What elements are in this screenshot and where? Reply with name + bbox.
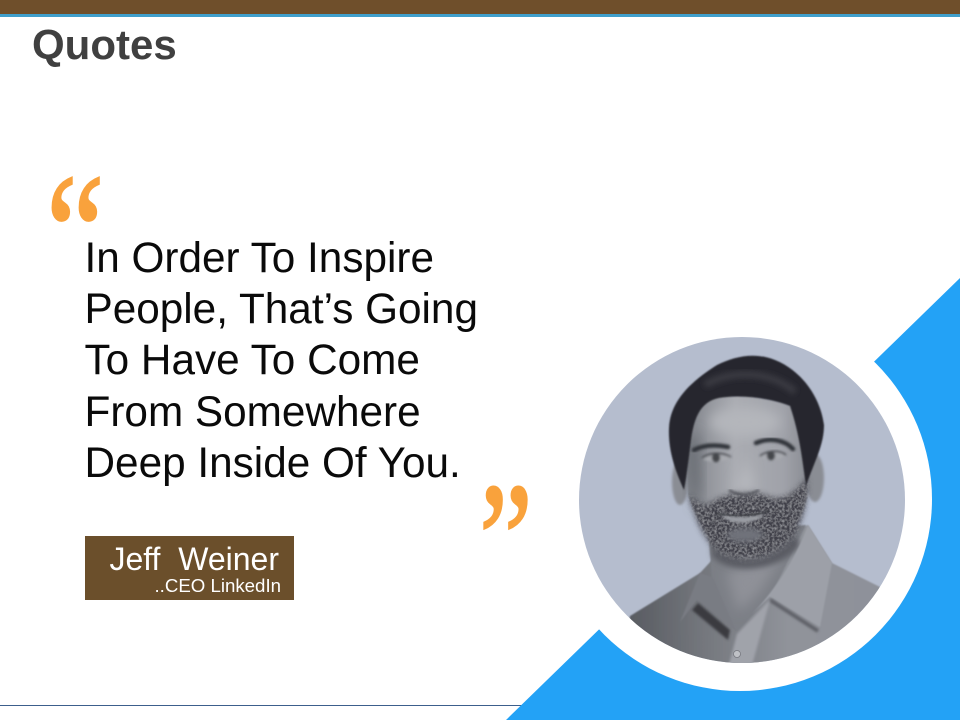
role: ..CEO LinkedIn (154, 575, 281, 596)
quote text: To Have To Come (84, 336, 420, 383)
quote text (84, 234, 478, 486)
button (734, 650, 740, 658)
quote text: From Somewhere (84, 388, 421, 435)
chin patch (727, 528, 763, 542)
blue triangle (506, 278, 960, 720)
eyebrows (694, 440, 793, 450)
hair sheen (705, 375, 795, 392)
portrait (579, 337, 905, 663)
neck (708, 524, 806, 614)
placket (729, 601, 770, 663)
mouth line (715, 511, 769, 515)
hair (669, 356, 824, 490)
nose highlight (736, 474, 756, 499)
quote text: Deep Inside Of You. (84, 439, 461, 486)
quote text: People, That’s Going (84, 285, 478, 332)
left cheek shadow (687, 430, 701, 510)
footer rule (0, 705, 525, 706)
decorative graphic: blue triangle with portrait (506, 278, 960, 720)
text: “ (46, 140, 105, 327)
eyes (702, 451, 786, 462)
right collar shadow (770, 600, 818, 631)
forehead highlight (707, 409, 780, 435)
shirt (629, 524, 880, 663)
left collar (682, 584, 697, 618)
portrait background (570, 330, 915, 670)
beard (689, 478, 807, 559)
text: ” (479, 450, 533, 632)
quote text: In Order To Inspire (84, 234, 434, 281)
white ring (548, 307, 932, 691)
neck highlight (728, 565, 776, 606)
chin shadow (712, 535, 800, 569)
lower lip (720, 513, 765, 523)
right collar (752, 525, 832, 627)
face (686, 395, 808, 558)
ears (672, 454, 824, 505)
attribution box (85, 536, 294, 600)
nose shadow (729, 490, 759, 494)
left collar shadow (692, 603, 730, 640)
name: Jeff Weiner (109, 541, 279, 577)
top header bar (0, 0, 960, 17)
title: Quotes (32, 21, 177, 68)
